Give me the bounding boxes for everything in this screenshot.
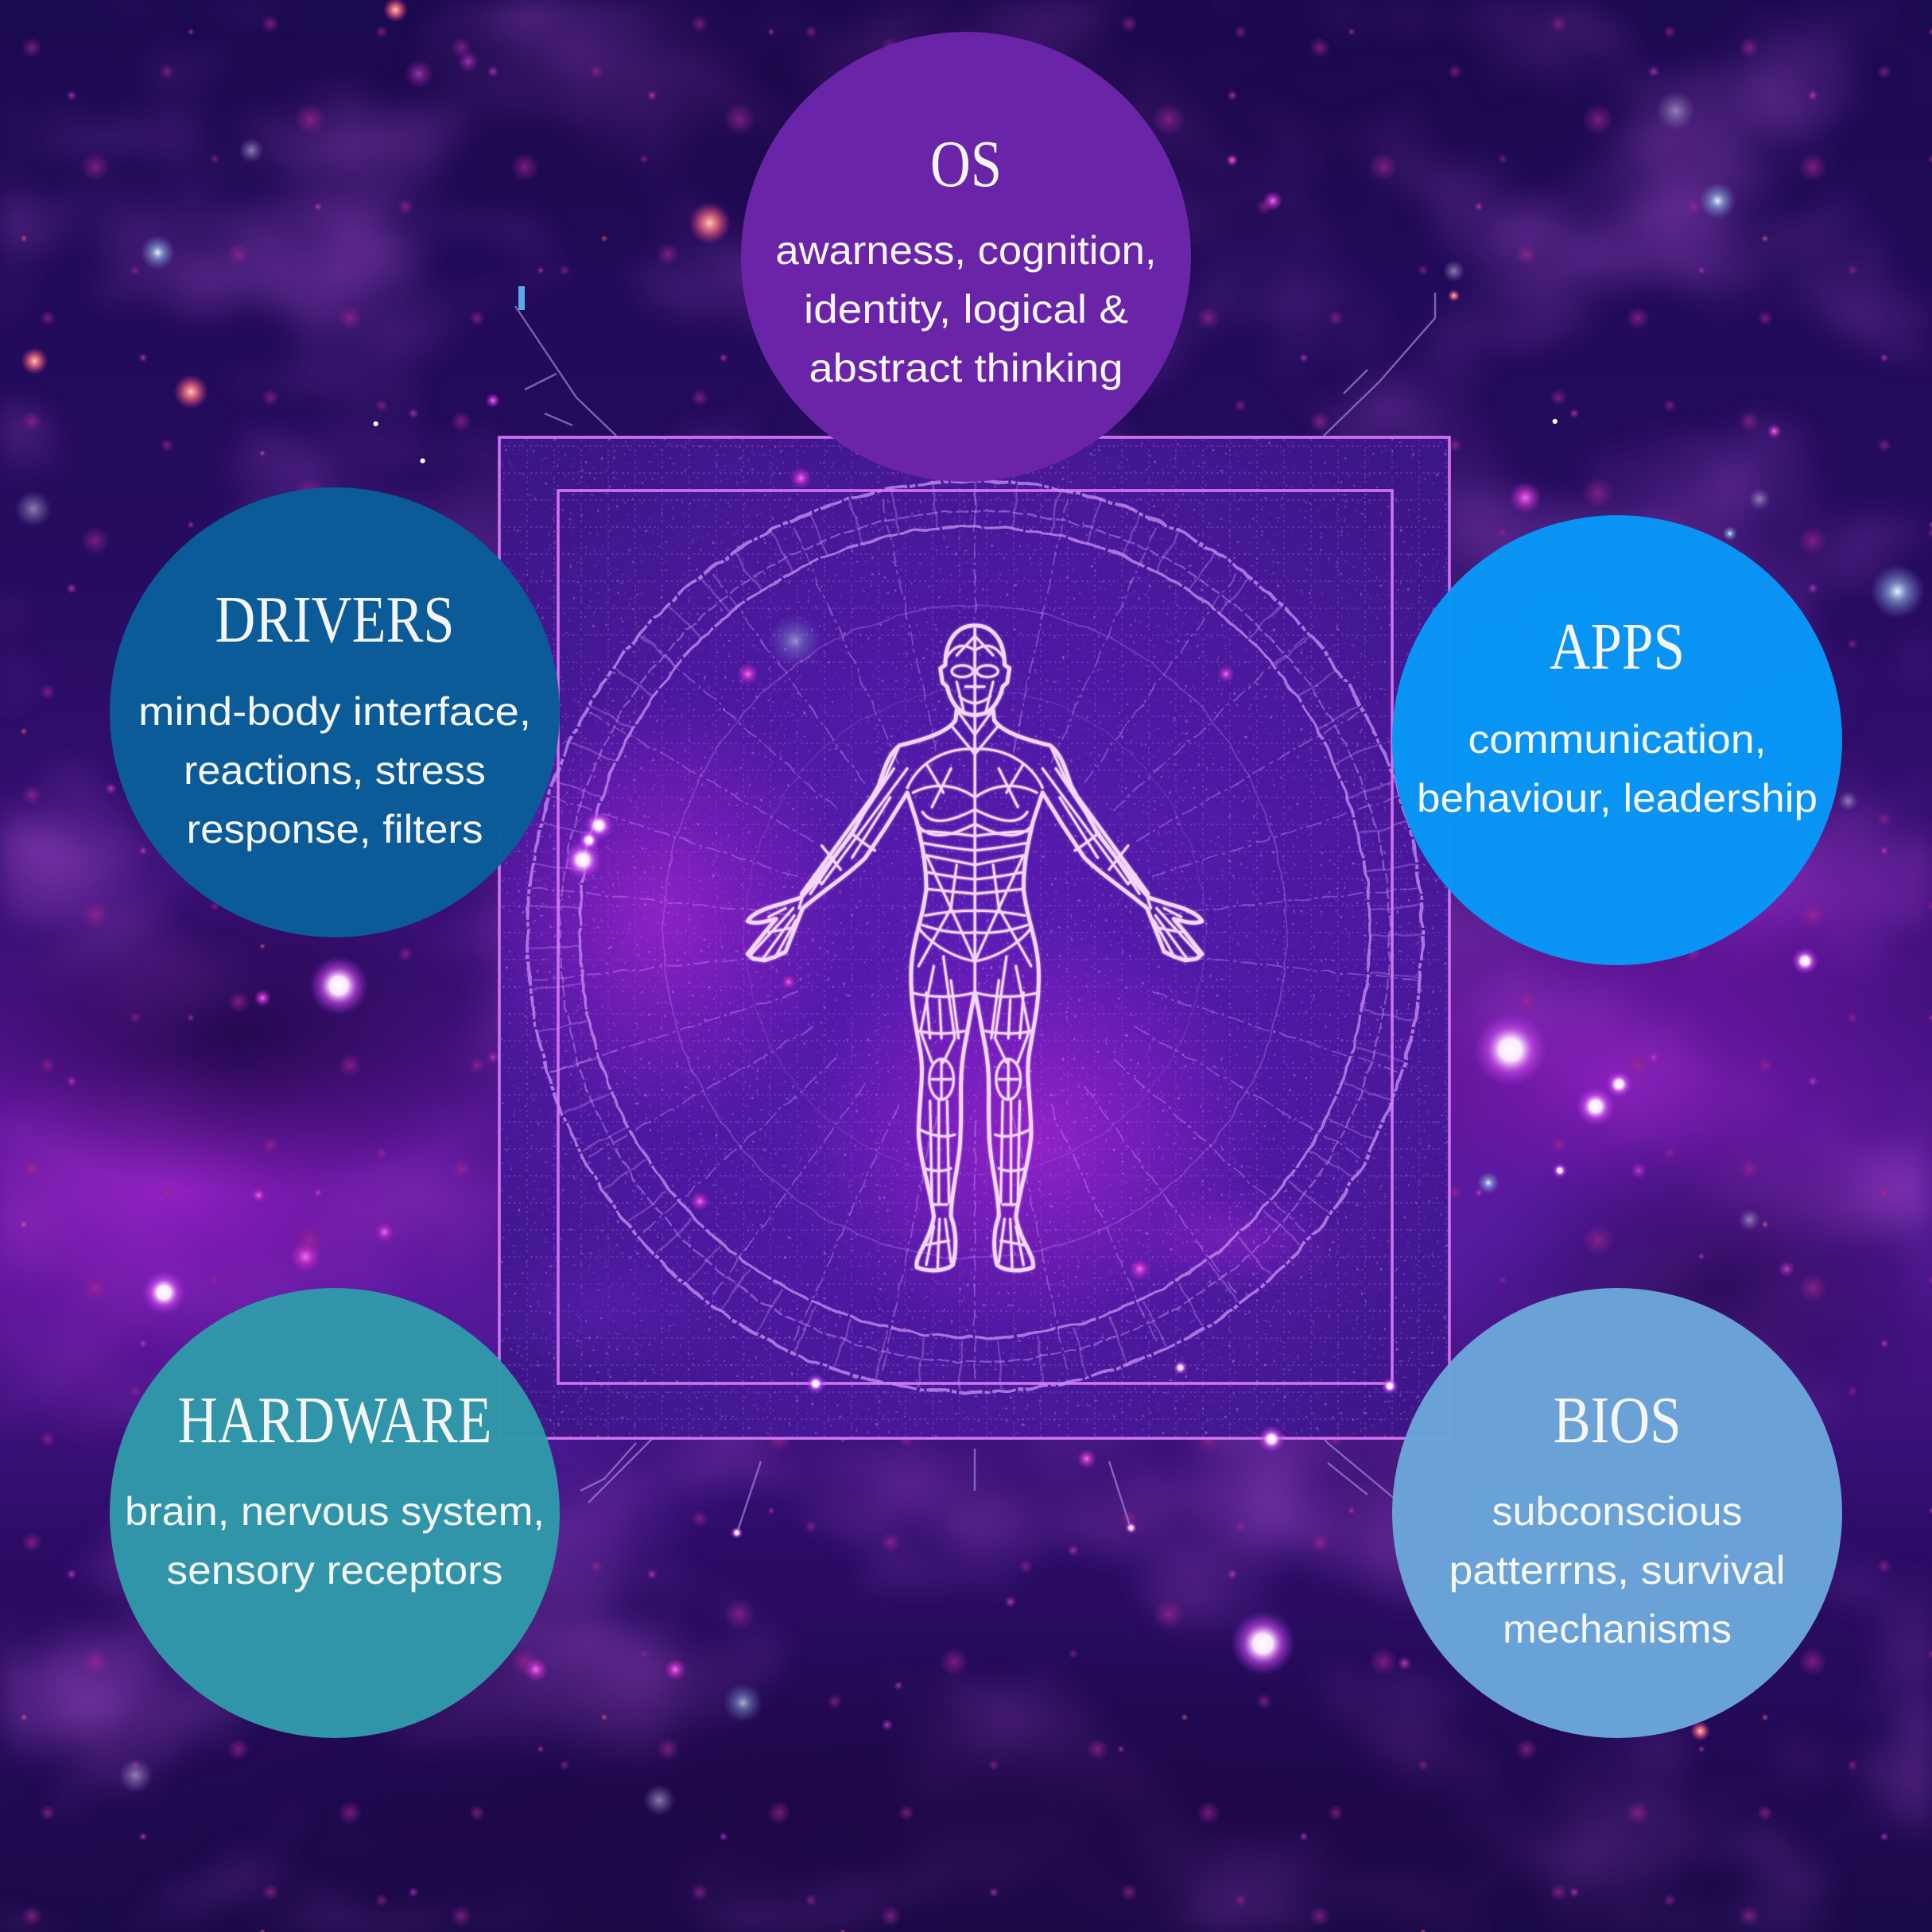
circuit traces outside frame	[515, 286, 1435, 1538]
text: BIOS description: subconscious	[1492, 1489, 1743, 1534]
text: DRIVERS description: reactions, stress	[184, 748, 486, 793]
text: BIOS description: patterrns, survival	[1449, 1548, 1786, 1593]
text: OS description: identity, logical &	[804, 287, 1128, 332]
text: HARDWARE description: brain, nervous system,	[125, 1489, 545, 1534]
text: HARDWARE description	[125, 1489, 545, 1593]
circle: HARDWARE	[110, 1288, 560, 1738]
text: DRIVERS description: response, filters	[186, 807, 483, 852]
text: APPS description	[1417, 717, 1818, 821]
text: DRIVERS description: mind-body interface,	[138, 689, 531, 734]
text: BIOS description: mechanisms	[1503, 1607, 1732, 1651]
heading: APPS: APPS	[1550, 610, 1685, 684]
text: BIOS description	[1449, 1489, 1786, 1651]
circle: OS	[741, 32, 1191, 482]
text: HARDWARE description: sensory receptors	[167, 1548, 502, 1593]
text: DRIVERS description	[138, 689, 531, 852]
text: OS description: awarness, cognition,	[776, 228, 1156, 273]
holographic rings and radial grid	[527, 481, 1422, 1392]
heading: DRIVERS: DRIVERS	[215, 583, 455, 657]
text: APPS description: communication,	[1468, 717, 1767, 762]
heading: HARDWARE: HARDWARE	[178, 1383, 491, 1457]
circle: BIOS	[1392, 1288, 1842, 1738]
heading: BIOS: BIOS	[1554, 1383, 1681, 1457]
circle: DRIVERS	[110, 487, 560, 937]
central frame panel	[469, 437, 1449, 1438]
circle: APPS	[1392, 515, 1842, 965]
text: OS description	[776, 228, 1156, 390]
text: APPS description: behaviour, leadership	[1417, 776, 1818, 821]
heading: OS: OS	[930, 127, 1002, 201]
human wireframe figure	[747, 626, 1202, 1271]
text: OS description: abstract thinking	[809, 346, 1123, 390]
